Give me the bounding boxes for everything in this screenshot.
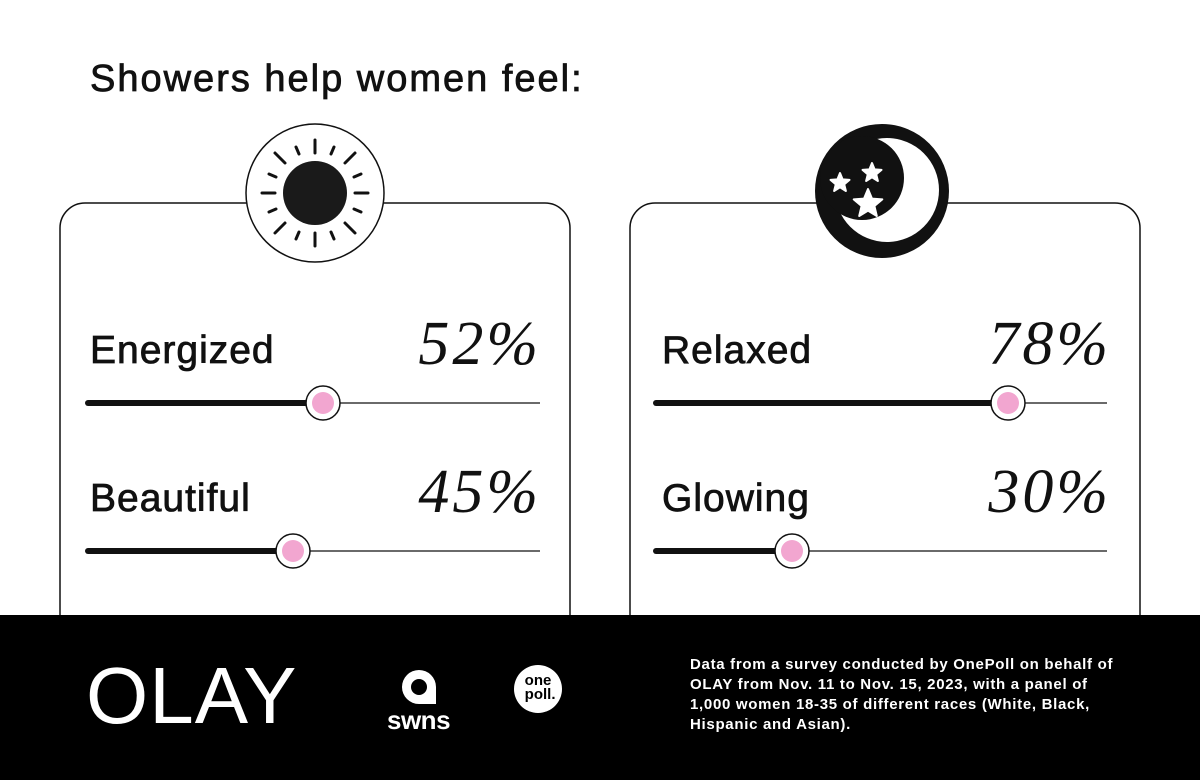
label: Relaxed: Relaxed	[662, 329, 812, 372]
percent 45: 45%	[418, 458, 541, 526]
percent 78: 78%	[988, 310, 1111, 378]
icon: sun	[246, 124, 384, 262]
percent 30: 30%	[988, 458, 1111, 526]
footnote: Data from a survey conducted by OnePoll on behalf of OLAY from Nov. 11 to Nov. 15, 2023, with a panel of 1,000 women 18-35 of different races (White, Black, Hispanic and Asian).	[690, 656, 1113, 733]
logo: onepoll: one	[525, 672, 551, 689]
logo: onepoll	[514, 665, 562, 713]
sliders	[88, 386, 1107, 568]
logo: swns: swns	[387, 705, 450, 735]
panel: left	[60, 203, 570, 615]
footer	[0, 615, 1200, 780]
label: Glowing: Glowing	[662, 477, 810, 520]
label: Beautiful: Beautiful	[90, 477, 251, 520]
label: Energized: Energized	[90, 329, 275, 372]
title: Showers help women feel:	[90, 58, 584, 100]
icon: moon	[815, 124, 949, 258]
panel: right	[630, 203, 1140, 615]
logo: onepoll: poll.	[525, 686, 556, 703]
percent 52: 52%	[418, 310, 541, 378]
logo: swns	[387, 670, 450, 735]
logo: OLAY: OLAY	[86, 651, 298, 740]
